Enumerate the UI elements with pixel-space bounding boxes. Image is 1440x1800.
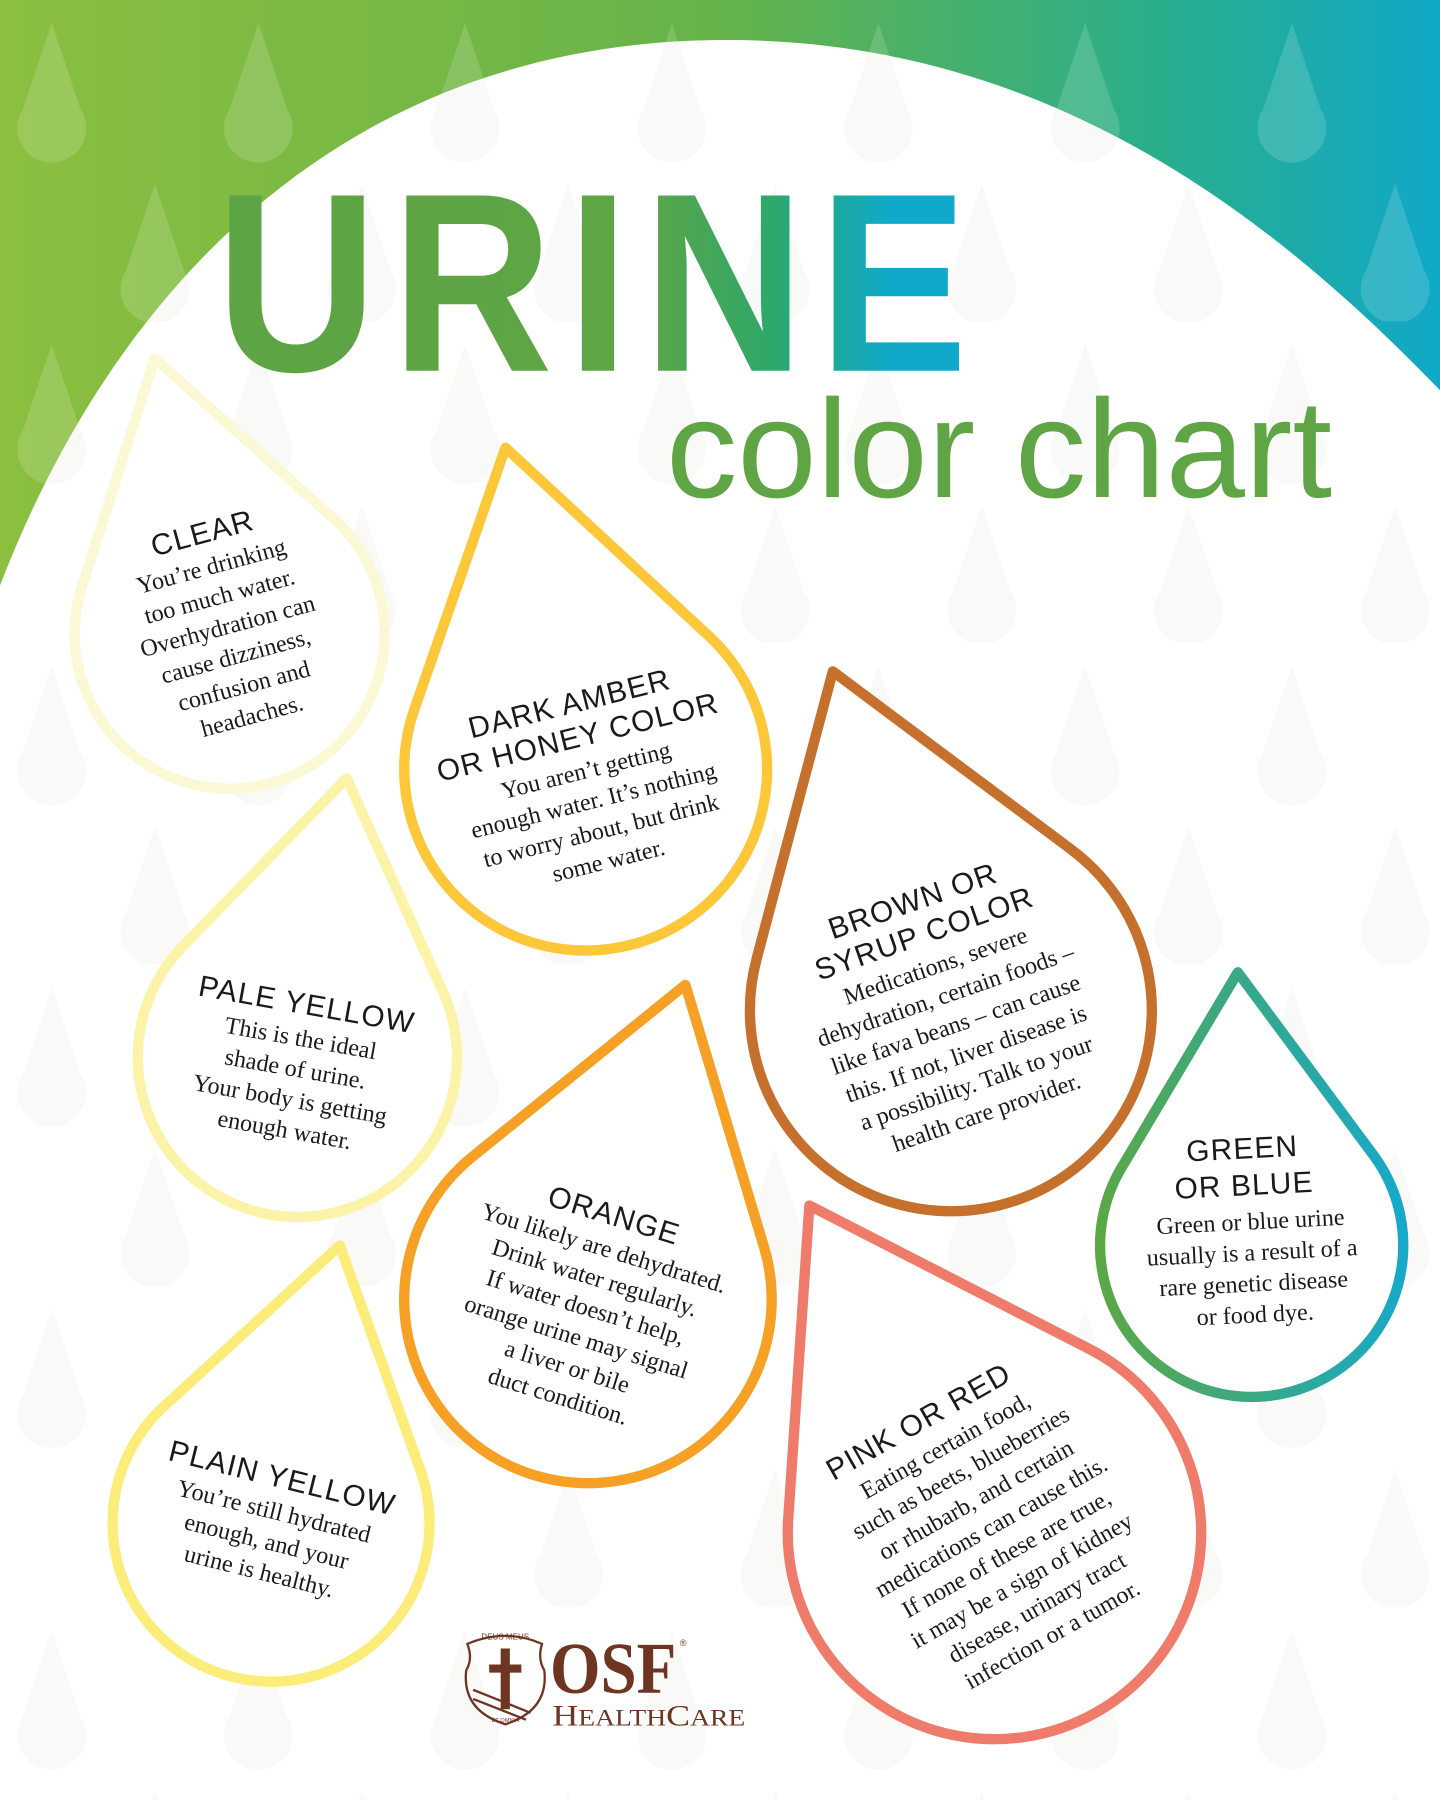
logo: OSF HealthCare <box>466 1628 745 1732</box>
drop: green or blue: GREEN <box>1185 1130 1299 1168</box>
drop: pink or red: PINK OR RED <box>821 1357 1017 1487</box>
drop: brown: a possibility. Talk to your <box>857 1031 1096 1136</box>
drop: pink or red: medications can cause this. <box>871 1452 1112 1603</box>
drop: dark amber: DARK AMBER <box>465 663 674 745</box>
drop: plain yellow: enough, and your <box>182 1509 351 1575</box>
drop: orange: Drink water regularly. <box>489 1235 700 1323</box>
icon: crest <box>466 1632 545 1724</box>
drop: clear: headaches. <box>198 690 306 743</box>
drop: dark amber: to worry about, but drink <box>481 789 723 873</box>
drop: clear: cause dizziness, <box>158 624 314 690</box>
drop: pink or red: or rhubarb, and certain <box>874 1435 1078 1566</box>
drop: clear: too much water. <box>142 564 298 630</box>
drop: clear: CLEAR <box>147 504 258 563</box>
icon: crest: DEUS MEUS <box>481 1632 529 1641</box>
header wave <box>0 0 1440 585</box>
drop: orange: If water doesn’t help, <box>483 1265 687 1351</box>
drop: brown <box>643 605 1207 1266</box>
drop: pale yellow: shade of urine. <box>223 1044 368 1095</box>
drop: pink or red: If none of these are true, <box>898 1485 1116 1624</box>
drop: green or blue: OR BLUE <box>1174 1166 1314 1206</box>
drop: green or blue: usually is a result of a <box>1146 1235 1358 1272</box>
drop: green or blue: rare genetic disease <box>1159 1267 1349 1302</box>
drop: plain yellow: urine is healthy. <box>181 1541 336 1603</box>
drop: pink or red <box>629 1104 1276 1800</box>
drop: clear <box>5 318 420 824</box>
subtitle: color chart: color chart <box>666 370 1332 527</box>
drop: pink or red: it may be a sign of kidney <box>907 1508 1138 1654</box>
drop: pale yellow: Your body is getting <box>191 1070 389 1130</box>
drop: orange: orange urine may signal <box>461 1291 691 1385</box>
drop: pink or red: Eating certain food, <box>856 1388 1035 1505</box>
drop: pale yellow: enough water. <box>216 1106 353 1155</box>
drop: clear: You’re drinking <box>134 534 289 600</box>
logo: OSF HealthCare: OSF <box>550 1628 676 1709</box>
drop: orange: duct condition. <box>485 1363 631 1431</box>
drop: pink or red: disease, urinary tract <box>944 1548 1131 1669</box>
drop: dark amber: some water. <box>550 835 668 888</box>
drop: plain yellow <box>79 1207 494 1715</box>
drop: pale yellow: PALE YELLOW <box>196 970 417 1040</box>
drop: brown: dehydration, certain foods – <box>814 939 1079 1053</box>
drop: clear: confusion and <box>175 656 313 717</box>
drop: dark amber: OR HONEY COLOR <box>433 687 722 789</box>
drop: brown: like fava beans – can cause <box>828 970 1084 1081</box>
drop: pale yellow: This is the ideal <box>223 1013 379 1065</box>
drop: brown: this. If not, liver disease is <box>842 1001 1090 1109</box>
drop: pink or red: infection or a tumor. <box>961 1576 1145 1695</box>
drop: orange: ORANGE <box>544 1180 684 1252</box>
drop: pink or red: such as beets, blueberries <box>848 1402 1074 1545</box>
drop: green or blue: or food dye. <box>1196 1299 1314 1331</box>
drop: green or blue <box>1086 965 1411 1404</box>
drop: brown: Medications, severe <box>840 923 1031 1011</box>
drop: brown: SYRUP COLOR <box>811 881 1038 987</box>
icon: crest: ET OMNIA <box>491 1718 519 1724</box>
drop: orange <box>358 931 861 1529</box>
drop: green or blue: Green or blue urine <box>1156 1205 1345 1240</box>
logo: OSF HealthCare: HEALTH CARE <box>552 1699 745 1732</box>
drop: clear: Overhydration can <box>138 591 318 663</box>
drop: orange: You likely are dehydrated. <box>478 1199 729 1299</box>
drop: brown: BROWN OR <box>824 857 1002 946</box>
drop: orange: a liver or bile <box>501 1336 632 1399</box>
drop: dark amber <box>329 404 806 989</box>
title: URINE: URINE <box>216 141 982 426</box>
drop: plain yellow: You’re still hydrated <box>174 1476 373 1549</box>
drop: dark amber: You aren’t getting <box>499 738 674 805</box>
logo: OSF HealthCare: ® <box>680 1638 687 1648</box>
drop: dark amber: enough water. It’s nothing <box>468 758 719 844</box>
drop: brown: health care provider. <box>889 1068 1084 1158</box>
drop: pale yellow <box>112 751 504 1242</box>
drop: plain yellow: PLAIN YELLOW <box>165 1435 399 1522</box>
